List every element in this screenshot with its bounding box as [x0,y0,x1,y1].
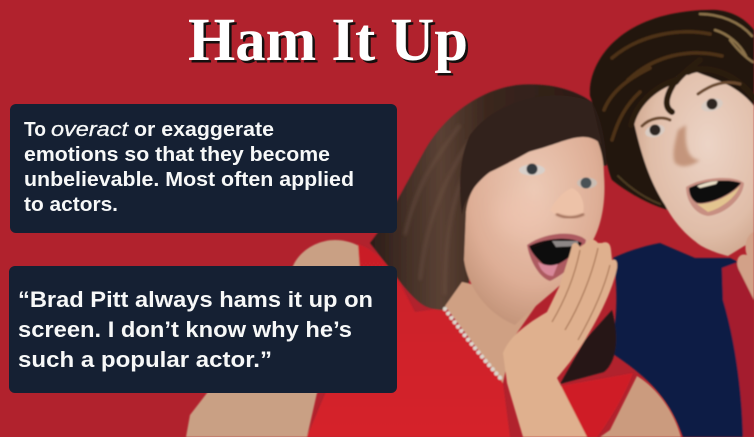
man: hair [590,10,754,210]
panel: example sentence [9,266,397,393]
panel: definition [10,104,397,233]
man: eyebrows [642,82,740,126]
woman: right eye [577,178,597,188]
example text: screen. I don’t know why he’s [18,317,352,342]
woman: pearl necklace [445,309,502,380]
definition text: unbelievable. Most often applied [24,169,354,191]
definition text: overact [51,119,130,141]
definition text [24,119,354,216]
woman: red dress [307,244,510,437]
woman: face [464,118,604,325]
title: Ham It Up: Ham It Up [190,10,470,76]
woman: nose [550,188,584,218]
man: hand on chin [737,232,754,300]
woman: right dress strip [555,373,633,437]
woman: hair [370,84,607,310]
woman: neck and chest [445,282,540,383]
example text: such a popular actor.” [18,347,272,372]
woman: right arm [600,376,681,437]
example text: “Brad Pitt always hams it up on [18,287,373,312]
woman: nose shadow [556,214,584,217]
man: right eye [700,96,724,114]
man: nose shadow [674,125,700,166]
woman: mouth [527,234,586,281]
title: Ham It Up: Ham It Up [188,7,468,74]
definition text: emotions so that they become [24,144,330,166]
man: red tie [722,262,754,437]
man: mouth [686,178,744,216]
photo: woman and man with exaggerated shocked expressions [186,10,754,437]
woman: finger separations [552,248,610,340]
woman: highlight on face [496,193,548,237]
woman: bangs [460,95,602,215]
man: hair highlights and curls [604,14,753,204]
man: face [633,70,754,256]
woman: hair strands [405,125,480,295]
definition text: or exaggerate [134,119,274,141]
woman: left eye [519,164,545,176]
woman: hair behind hand [560,310,616,384]
definition text: To [24,119,46,141]
example text [18,287,373,372]
woman: hand covering mouth [503,240,617,437]
man: navy shirt [610,243,754,437]
woman: shoulder and arm [186,240,400,437]
man: left eye [644,123,666,139]
definition text: to actors. [24,194,118,216]
man: hairline curls [631,60,754,125]
